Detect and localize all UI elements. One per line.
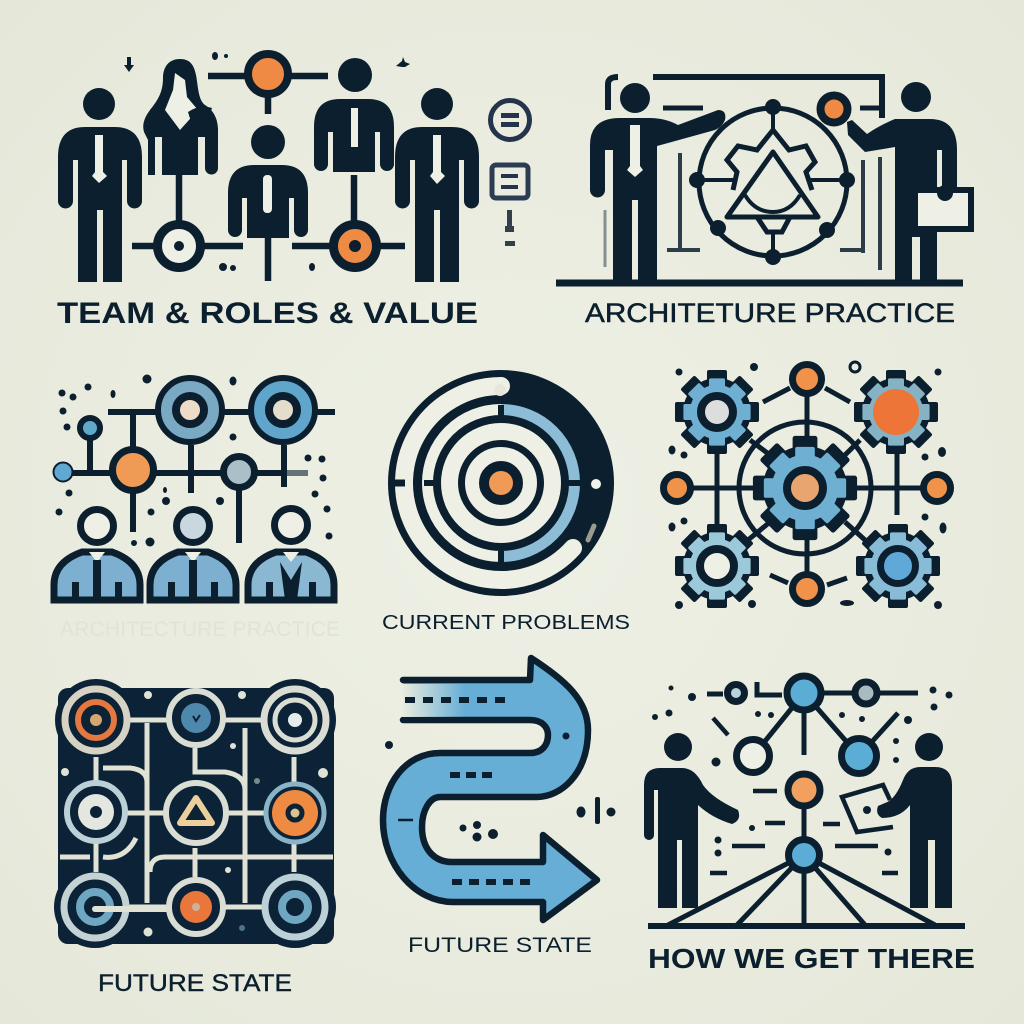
person: left	[644, 733, 739, 908]
heading: architecture practice: ARCHITETURE PRACTICE	[585, 298, 955, 328]
node: top orange	[248, 54, 288, 94]
panel: people network	[54, 374, 340, 641]
connector lines: network	[63, 412, 335, 543]
connector lines: team	[132, 76, 405, 281]
arrow: s-curve	[383, 658, 597, 920]
person: right	[395, 88, 479, 282]
node: lower left	[158, 224, 200, 268]
scattered dots	[668, 362, 946, 609]
scattered dots	[652, 686, 952, 856]
person icon: left	[54, 510, 140, 602]
node: bottom left	[64, 876, 167, 938]
dashes on arrow	[398, 700, 533, 882]
node: top right	[264, 689, 326, 751]
gear: top left	[675, 370, 759, 454]
heading: future state: FUTURE STATE	[408, 934, 592, 957]
dark board	[54, 679, 336, 948]
icon: gear triangle diagram	[689, 99, 855, 265]
panel: architecture practice	[556, 77, 971, 328]
panel: future state grid	[54, 679, 336, 997]
node: centre triangle	[166, 783, 226, 843]
scattered dots	[56, 374, 332, 546]
gear: top right	[854, 370, 938, 454]
node: bottom middle orange	[169, 880, 223, 934]
heading: how we get there: HOW WE GET THERE	[648, 943, 975, 974]
panel: gears network	[664, 362, 950, 609]
target centre	[489, 384, 601, 540]
panel: team and roles	[57, 52, 530, 330]
node: lower right orange	[334, 224, 376, 268]
person: back right	[314, 58, 394, 172]
small marks	[385, 732, 616, 842]
nodes	[728, 676, 877, 870]
node: top middle	[169, 691, 223, 745]
network lines	[648, 682, 965, 926]
nodes: network	[54, 378, 315, 490]
heading: team roles value: TEAM & ROLES & VALUE	[57, 297, 478, 330]
gear: bottom right	[856, 524, 940, 608]
node: top left	[65, 689, 127, 751]
icon: clipboard	[915, 185, 971, 229]
panel: s-curve arrow	[383, 658, 616, 957]
target rings	[395, 386, 580, 580]
small marks	[124, 52, 410, 271]
board dots	[61, 691, 328, 936]
connector lines: gears	[677, 379, 937, 589]
short dashes	[710, 718, 898, 873]
faded caption: ARCHITECTURE PRACTICE	[60, 618, 340, 641]
heading: current problems: CURRENT PROBLEMS	[382, 612, 630, 634]
node: middle right orange	[266, 784, 324, 842]
person: woman	[143, 59, 218, 175]
icon: paper	[842, 785, 893, 832]
node: orange	[820, 96, 848, 122]
person: presenter left	[590, 83, 725, 280]
grid lines	[60, 720, 333, 907]
nodes: orange	[664, 364, 950, 604]
icon: badges	[490, 100, 530, 246]
person icon: right	[248, 508, 334, 602]
node: middle left	[67, 783, 125, 841]
person icon: centre	[150, 510, 236, 602]
person: presenter right	[847, 82, 957, 280]
person: centre	[228, 125, 308, 238]
person: left	[58, 88, 142, 282]
frame and base line	[556, 77, 963, 283]
gear: bottom left	[675, 524, 759, 608]
heading: future state: FUTURE STATE	[98, 970, 292, 997]
panel: how we get there	[644, 676, 975, 974]
person: right	[877, 733, 952, 908]
panel: current problems	[382, 370, 630, 634]
target disc	[388, 370, 614, 596]
gear: centre	[753, 436, 857, 540]
node: bottom right	[265, 877, 325, 937]
